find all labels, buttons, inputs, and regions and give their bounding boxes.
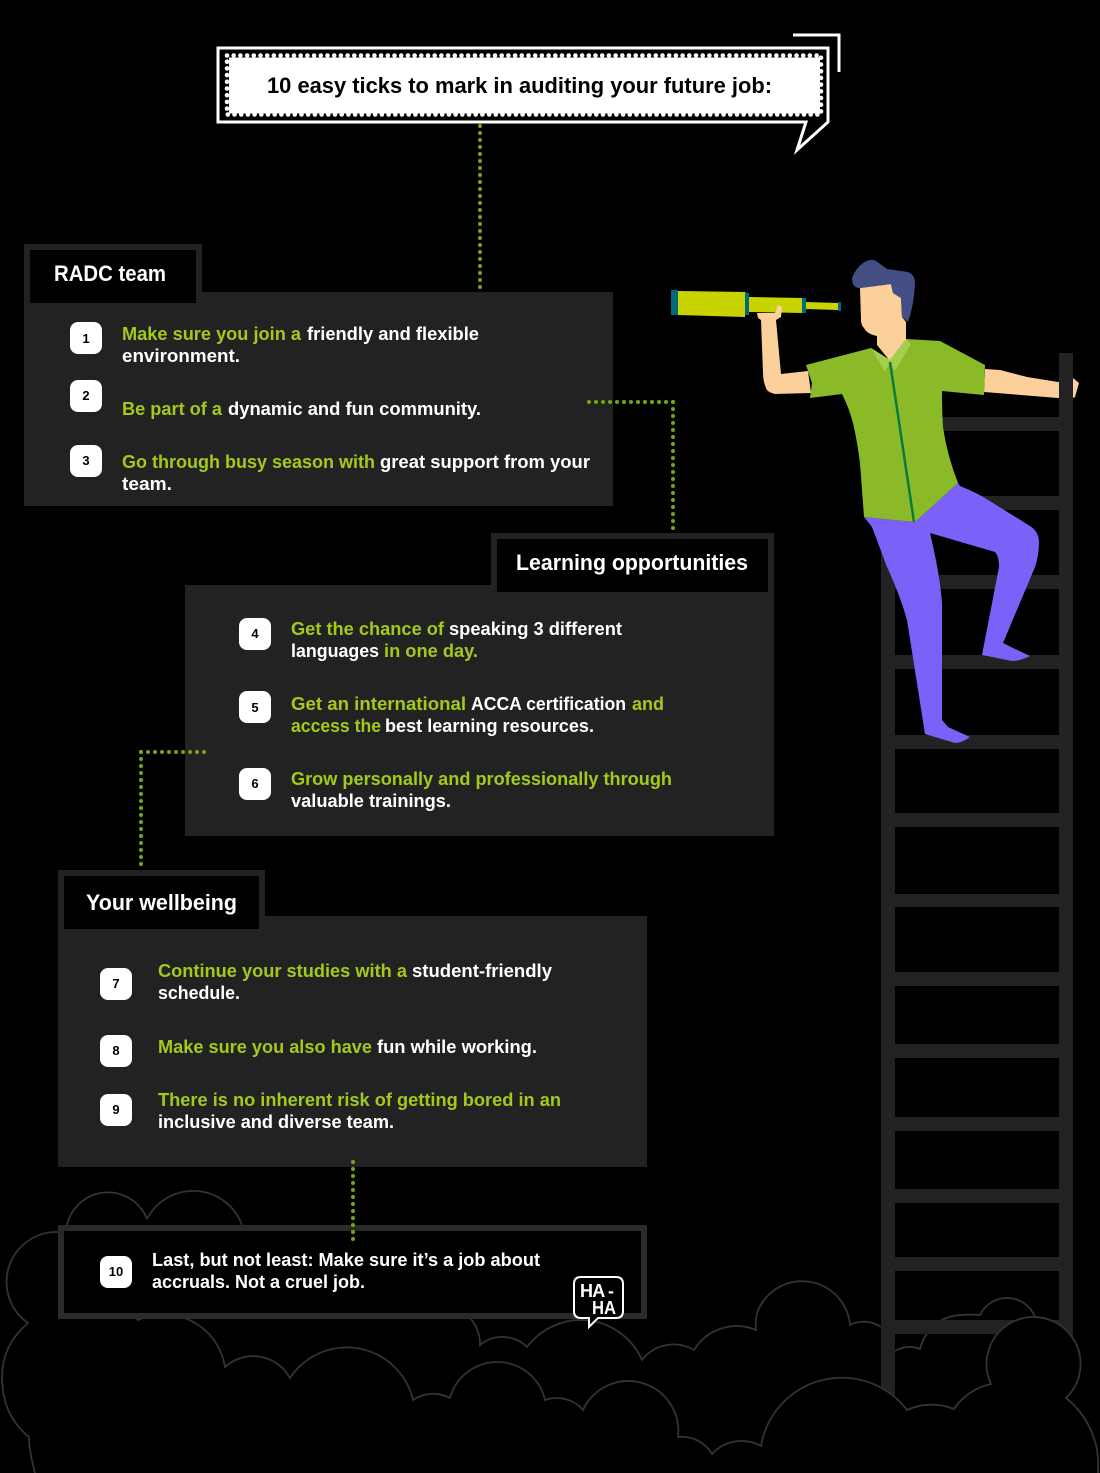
panel: Learning opportunities: in one day.: [384, 640, 478, 661]
panel: Your wellbeing: [58, 870, 647, 1167]
panel: RADC team: 3: [82, 453, 90, 468]
shirt collar: [871, 339, 911, 372]
panel: RADC team: team.: [122, 473, 172, 494]
panel: Your wellbeing: 9: [112, 1102, 120, 1117]
icon: HA-HA speech bubble: [574, 1277, 623, 1327]
panel: Your wellbeing: Continue your studies with a: [158, 960, 408, 981]
panel: Learning opportunities: Grow personally and professionally through: [291, 768, 672, 789]
panel: RADC team: Make sure you join a: [122, 323, 302, 344]
ladder: [881, 353, 1073, 1400]
panel: RADC team: 1: [82, 331, 90, 346]
panel: Your wellbeing: inclusive and diverse team.: [158, 1111, 394, 1132]
head and neck: [860, 284, 906, 361]
icon: telescope: [671, 290, 841, 317]
panel: final tick: 10: [109, 1264, 123, 1279]
connector: Learning opportunities to Your wellbeing: [141, 752, 206, 869]
panel: Learning opportunities: Learning opportunities: [516, 550, 748, 575]
panel: RADC team: dynamic and fun community.: [228, 398, 481, 419]
panel: Learning opportunities: access the: [291, 715, 381, 736]
panel: RADC team: 2: [82, 388, 90, 403]
panel: final tick: [61, 1228, 644, 1316]
left arm and hand: [757, 305, 811, 394]
connector: Your wellbeing to final tick: [351, 1162, 355, 1240]
panel: Learning opportunities: valuable trainings.: [291, 790, 451, 811]
connector: title to RADC team: [478, 126, 482, 291]
panel: RADC team: friendly and flexible: [307, 323, 479, 344]
shirt placket: [890, 362, 914, 522]
panel: RADC team: Be part of a: [122, 398, 223, 419]
panel: Your wellbeing: schedule.: [158, 982, 240, 1003]
panel: Learning opportunities: 5: [251, 700, 259, 715]
panel: Learning opportunities: Get an international: [291, 693, 466, 714]
background clouds: back row: [67, 1191, 1035, 1360]
right forearm and hand gripping ladder: [984, 369, 1079, 398]
illustration: man with telescope: [671, 260, 1039, 743]
panel: RADC team: RADC team: [54, 261, 166, 286]
title speech banner: 10 easy ticks to mark in auditing your future job:: [267, 73, 772, 98]
panel: Learning opportunities: [185, 533, 774, 836]
panel: Learning opportunities: languages: [291, 640, 379, 661]
panel: RADC team: Go through busy season with: [122, 451, 375, 472]
panel: final tick: Last, but not least: Make sure it’s a job about: [152, 1249, 540, 1270]
trousers: [864, 483, 1039, 743]
foreground cloud: [2, 1232, 1098, 1473]
icon: HA-HA speech bubble: HA -: [580, 1281, 614, 1301]
hair: [852, 260, 915, 322]
panel: Learning opportunities: speaking 3 different: [449, 618, 622, 639]
panel: Learning opportunities: Get the chance of: [291, 618, 445, 639]
icon: HA-HA speech bubble: HA: [592, 1298, 616, 1318]
panel: Your wellbeing: student-friendly: [412, 960, 553, 981]
panel: Learning opportunities: best learning resources.: [385, 715, 594, 736]
panel: Your wellbeing: 7: [112, 976, 120, 991]
title speech banner: [218, 35, 839, 150]
panel: Your wellbeing: Your wellbeing: [86, 890, 237, 915]
panel: Learning opportunities: 4: [251, 626, 259, 641]
panel: Your wellbeing: There is no inherent risk of getting bored in an: [158, 1089, 561, 1110]
panel: Learning opportunities: and: [632, 693, 664, 714]
connector: RADC team to Learning opportunities: [587, 402, 673, 530]
panel: Learning opportunities: ACCA certification: [471, 693, 626, 714]
panel: Your wellbeing: fun while working.: [377, 1036, 537, 1057]
panel: RADC team: great support from your: [380, 451, 590, 472]
panel: RADC team: environment.: [122, 345, 240, 366]
panel: Your wellbeing: 8: [112, 1043, 120, 1058]
panel: final tick: accruals. Not a cruel job.: [152, 1271, 365, 1292]
panel: RADC team: [24, 244, 613, 506]
panel: Learning opportunities: 6: [251, 776, 259, 791]
shirt: [806, 339, 985, 522]
panel: Your wellbeing: Make sure you also have: [158, 1036, 372, 1057]
